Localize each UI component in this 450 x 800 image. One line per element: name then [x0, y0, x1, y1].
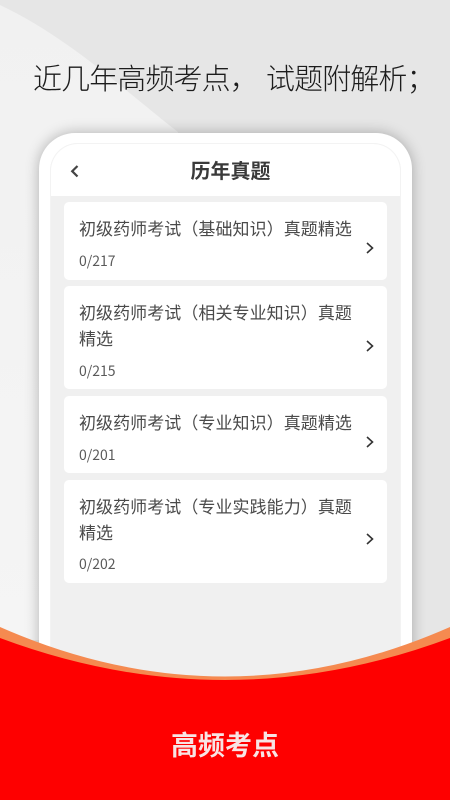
footer label: 高频考点	[171, 731, 279, 761]
list card 4: 0/202	[79, 554, 116, 574]
list card 2: 0/215	[79, 361, 116, 381]
title: 近几年高频考点，	[33, 64, 258, 96]
phone screen	[50, 143, 401, 733]
list card 1	[64, 202, 387, 280]
icon: chevron	[366, 340, 374, 352]
list card 2	[64, 286, 387, 389]
red curved footer	[0, 627, 450, 800]
page heading: 历年真题	[190, 161, 270, 183]
list card 1: 0/217	[79, 251, 116, 271]
list card 4: 精选	[79, 524, 113, 543]
list card 4: 初级药师考试（专业实践能力）真题	[79, 498, 352, 517]
icon: chevron	[366, 242, 374, 254]
list card 3	[64, 396, 387, 473]
icon: chevron	[366, 533, 374, 545]
app header	[51, 144, 400, 196]
icon: chevron	[366, 436, 374, 448]
icon: back arrow	[70, 165, 78, 178]
list card 3: 初级药师考试（专业知识）真题精选	[79, 414, 352, 433]
list card 3: 0/201	[79, 445, 116, 465]
phone mockup	[39, 133, 412, 733]
list card 2: 初级药师考试（相关专业知识）真题	[79, 304, 352, 323]
list card 2: 精选	[79, 330, 113, 349]
title: 试题附解析；	[266, 64, 435, 96]
title	[33, 64, 435, 96]
list card 1: 初级药师考试（基础知识）真题精选	[79, 220, 352, 239]
list card 4	[64, 480, 387, 583]
